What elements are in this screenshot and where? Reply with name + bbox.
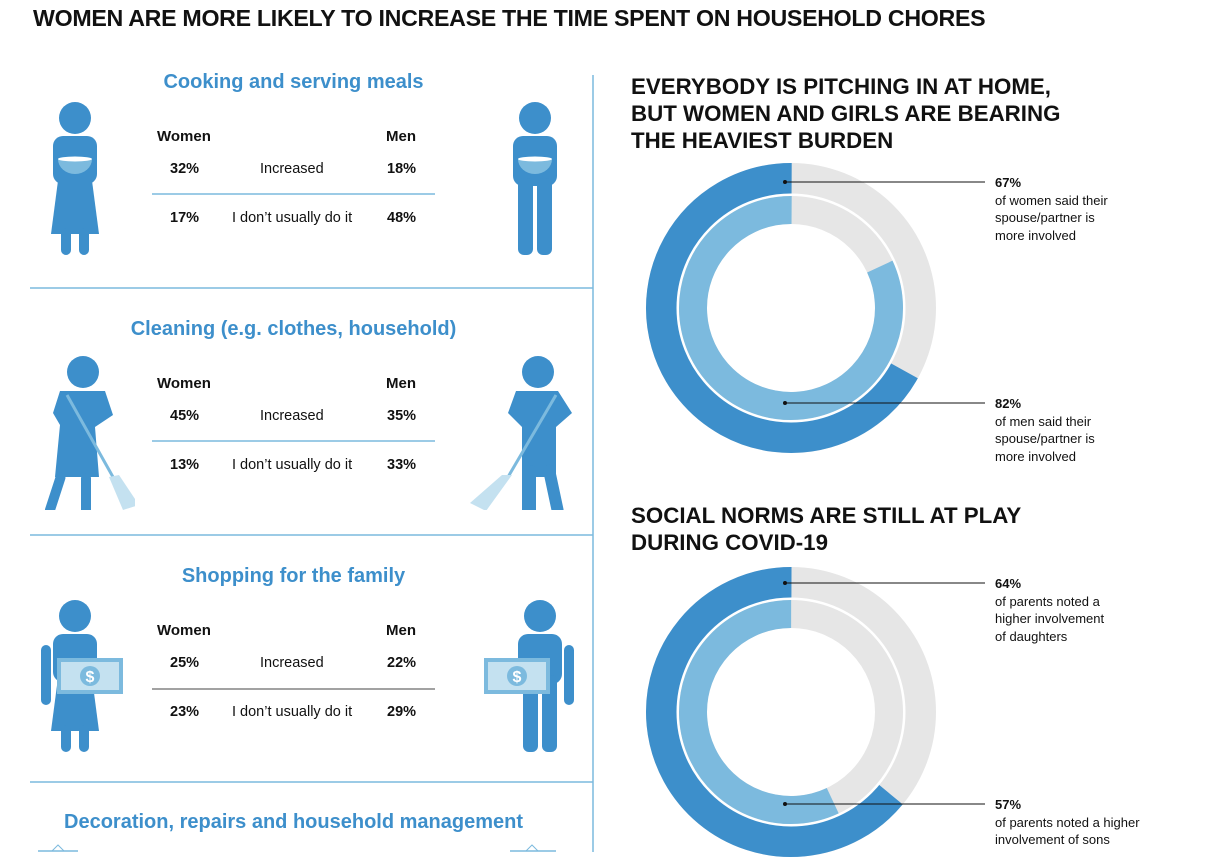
icon: woman with bowl bbox=[51, 102, 99, 255]
table: cleaning: Women bbox=[157, 375, 211, 392]
callout: 57%: involvement of sons bbox=[995, 832, 1110, 847]
callout: 67% bbox=[995, 175, 1108, 242]
callout: 82%: spouse/partner is bbox=[995, 431, 1095, 446]
callout: 67%: more involved bbox=[995, 228, 1076, 242]
title: WOMEN ARE MORE LIKELY TO INCREASE THE TIME SPENT ON HOUSEHOLD CHORES bbox=[33, 5, 985, 31]
callout: 64%: of daughters bbox=[995, 628, 1067, 644]
table: shopping: Women bbox=[157, 622, 211, 639]
table: shopping: I don’t usually do it bbox=[232, 704, 352, 720]
donut chart 1 bbox=[646, 163, 936, 453]
heading: cooking: Cooking and serving meals bbox=[163, 71, 424, 93]
table: cleaning: 33% bbox=[387, 457, 416, 473]
table: cleaning: 13% bbox=[170, 457, 199, 473]
table: shopping: 29% bbox=[387, 704, 416, 720]
table: cooking: I don’t usually do it bbox=[232, 210, 352, 226]
callout: 82%: 82% bbox=[995, 396, 1021, 411]
callout: 57%: 57% bbox=[995, 797, 1021, 812]
donut chart 2 bbox=[646, 567, 936, 857]
heading: social norms: SOCIAL NORMS ARE STILL AT PLAY bbox=[631, 503, 1021, 528]
heading: social norms: DURING COVID-19 bbox=[631, 530, 828, 555]
heading: everybody pitching in: BUT WOMEN AND GIRLS ARE BEARING bbox=[631, 101, 1060, 126]
table: shopping: 22% bbox=[387, 655, 416, 671]
table: shopping: 25% bbox=[170, 655, 199, 671]
heading: cleaning: Cleaning (e.g. clothes, household) bbox=[131, 318, 456, 340]
callout: 64%: higher involvement bbox=[995, 611, 1104, 626]
panel: shopping bbox=[157, 565, 416, 720]
heading: shopping: Shopping for the family bbox=[182, 565, 405, 587]
icon: woman with money: $ bbox=[86, 669, 95, 686]
table: cooking: Women bbox=[157, 128, 211, 145]
callout: 64% bbox=[995, 576, 1104, 644]
table: cleaning: 35% bbox=[387, 408, 416, 424]
table: cleaning: I don’t usually do it bbox=[232, 457, 352, 473]
table: cooking: 32% bbox=[170, 161, 199, 177]
heading: social norms bbox=[631, 503, 1021, 555]
callout: 64%: of parents noted a bbox=[995, 594, 1100, 608]
panel: cleaning bbox=[131, 318, 456, 473]
callout: 67%: 67% bbox=[995, 175, 1021, 190]
callout: 67%: of women said their bbox=[995, 192, 1108, 208]
table: shopping: 23% bbox=[170, 704, 199, 720]
heading: everybody pitching in bbox=[631, 74, 1060, 153]
callout: 67%: spouse/partner is bbox=[995, 210, 1095, 225]
table: cooking: 18% bbox=[387, 161, 416, 177]
heading: everybody pitching in: THE HEAVIEST BURDEN bbox=[631, 128, 893, 153]
table: cooking bbox=[157, 128, 416, 226]
table: shopping: Increased bbox=[260, 655, 324, 671]
heading: decoration: Decoration, repairs and household management bbox=[64, 811, 523, 833]
panel: cooking bbox=[157, 71, 424, 226]
table: cleaning: Men bbox=[386, 375, 416, 392]
table: cleaning: Increased bbox=[260, 408, 324, 424]
callout: 82% bbox=[995, 396, 1095, 464]
table: cleaning: 45% bbox=[170, 408, 199, 424]
heading: everybody pitching in: EVERYBODY IS PITCHING IN AT HOME, bbox=[631, 74, 1051, 99]
table: cooking: Men bbox=[386, 128, 416, 145]
table: cooking: Increased bbox=[260, 161, 324, 177]
icon: woman with broom bbox=[44, 356, 135, 510]
callout: 57%: of parents noted a higher bbox=[995, 814, 1140, 830]
table: cooking: 48% bbox=[387, 210, 416, 226]
icon: man with broom bbox=[470, 356, 572, 510]
callout: 82%: more involved bbox=[995, 448, 1076, 464]
icon: woman with money bbox=[41, 600, 123, 752]
callout: 57% bbox=[995, 797, 1140, 847]
table: shopping: Men bbox=[386, 622, 416, 639]
callout: 82%: of men said their bbox=[995, 414, 1091, 428]
table: shopping bbox=[157, 622, 416, 720]
icon: man with money: $ bbox=[513, 669, 522, 686]
icon: man with money bbox=[484, 600, 574, 752]
callout: 64%: 64% bbox=[995, 576, 1021, 591]
icon: man with bowl bbox=[513, 102, 557, 255]
table: cleaning bbox=[157, 375, 416, 473]
table: cooking: 17% bbox=[170, 210, 199, 226]
